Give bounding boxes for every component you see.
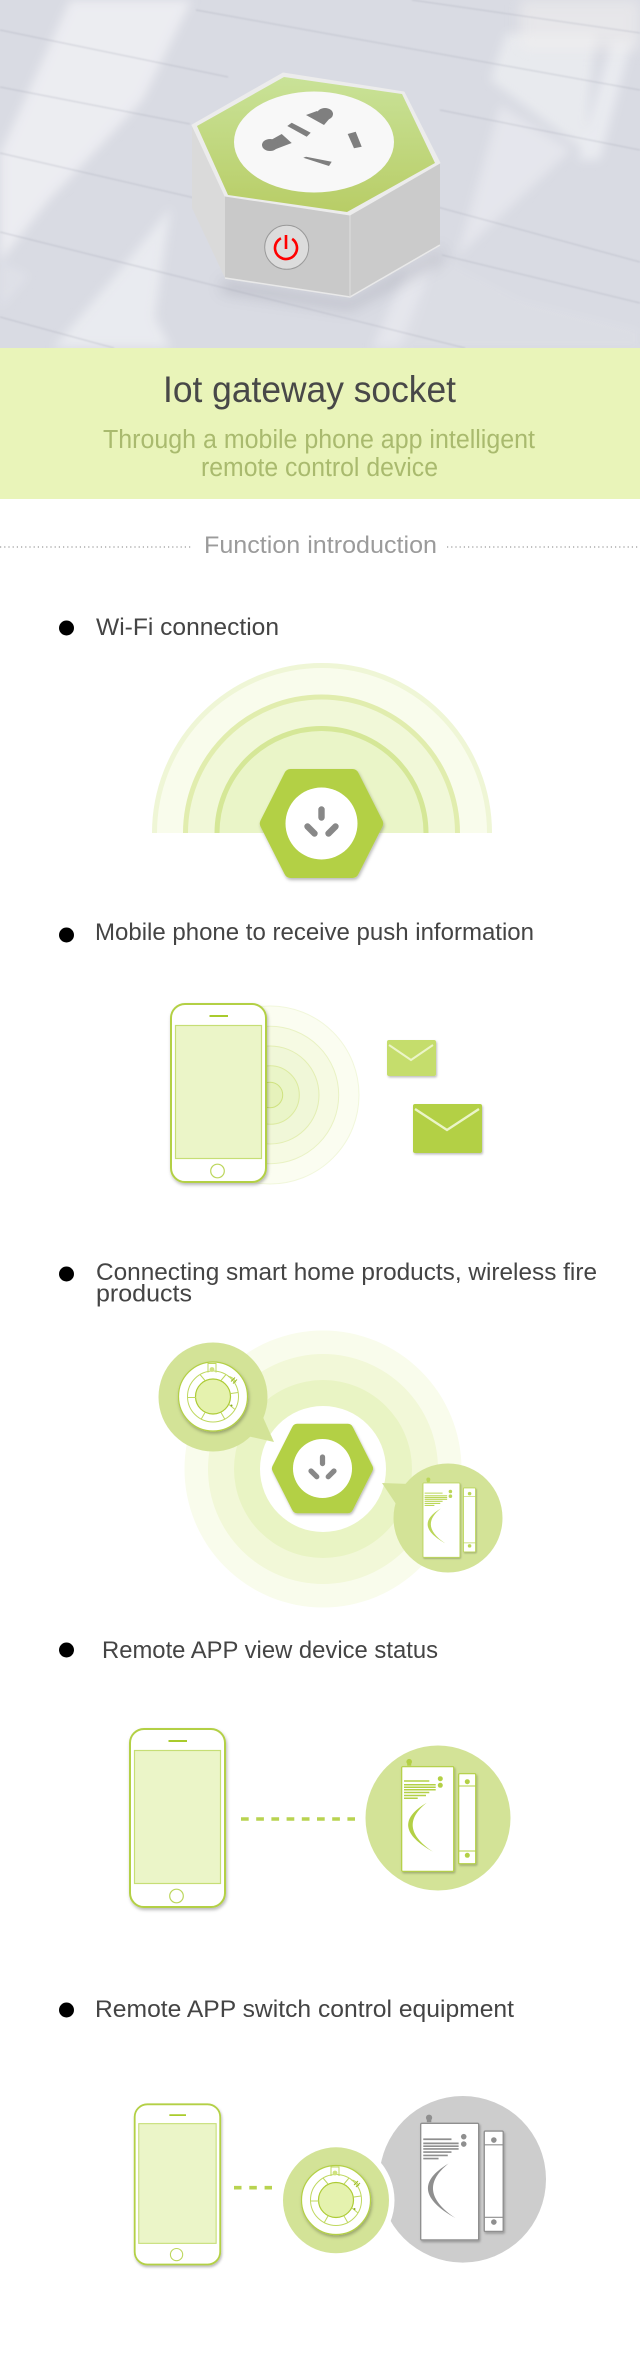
feature heading: push: Mobile phone to receive push information xyxy=(95,919,534,946)
dashed link xyxy=(241,1817,355,1821)
feature heading: smart home: Connecting smart home products, wireless fire xyxy=(96,1259,597,1286)
icon: phone xyxy=(135,2104,220,2264)
section heading: function introduction: Function introduction xyxy=(204,532,437,559)
bubble: door sensor xyxy=(382,1464,502,1572)
icon: phone xyxy=(171,1004,266,1182)
icon: gray sensor circle xyxy=(379,2096,546,2263)
dashed link xyxy=(234,2186,272,2189)
diagram: socket linking detector and door sensor xyxy=(158,1330,502,1608)
product: hexagonal socket xyxy=(192,73,440,297)
icon: large envelope xyxy=(413,1104,482,1153)
icon: detector circle xyxy=(278,2142,394,2259)
icon: socket hexagon xyxy=(272,1424,373,1513)
power button xyxy=(265,225,309,269)
icon: socket hexagon xyxy=(260,769,383,878)
feature heading: switch control: Remote APP switch control equipment xyxy=(95,1996,514,2023)
title: Iot gateway socket xyxy=(163,369,457,410)
feature heading: smart home: products xyxy=(96,1280,192,1308)
signal rings xyxy=(181,1006,359,1184)
socket slots xyxy=(262,108,362,166)
feature heading: wi-fi: Wi-Fi connection xyxy=(96,614,279,641)
diagram: phone to detector to sensor xyxy=(135,2096,546,2264)
subtitle xyxy=(103,426,535,482)
diagram: phone with signal and envelopes xyxy=(171,1004,482,1184)
diagram: phone to door sensor xyxy=(130,1729,510,1907)
panel: title band xyxy=(0,348,640,499)
icon: door sensor in circle xyxy=(366,1746,510,1890)
icon: phone xyxy=(130,1729,225,1907)
subtitle: remote control device xyxy=(201,454,438,482)
feature heading: device status: Remote APP view device status xyxy=(102,1637,438,1664)
bubble: smoke detector xyxy=(158,1342,274,1452)
feature heading: smart home xyxy=(59,1259,597,1308)
icon: small envelope xyxy=(387,1040,436,1076)
diagram: wi-fi arcs and socket xyxy=(154,666,490,878)
subtitle: Through a mobile phone app intelligent xyxy=(103,426,535,454)
signal rings xyxy=(184,1330,462,1608)
panel: hero photo background with product xyxy=(0,0,640,348)
